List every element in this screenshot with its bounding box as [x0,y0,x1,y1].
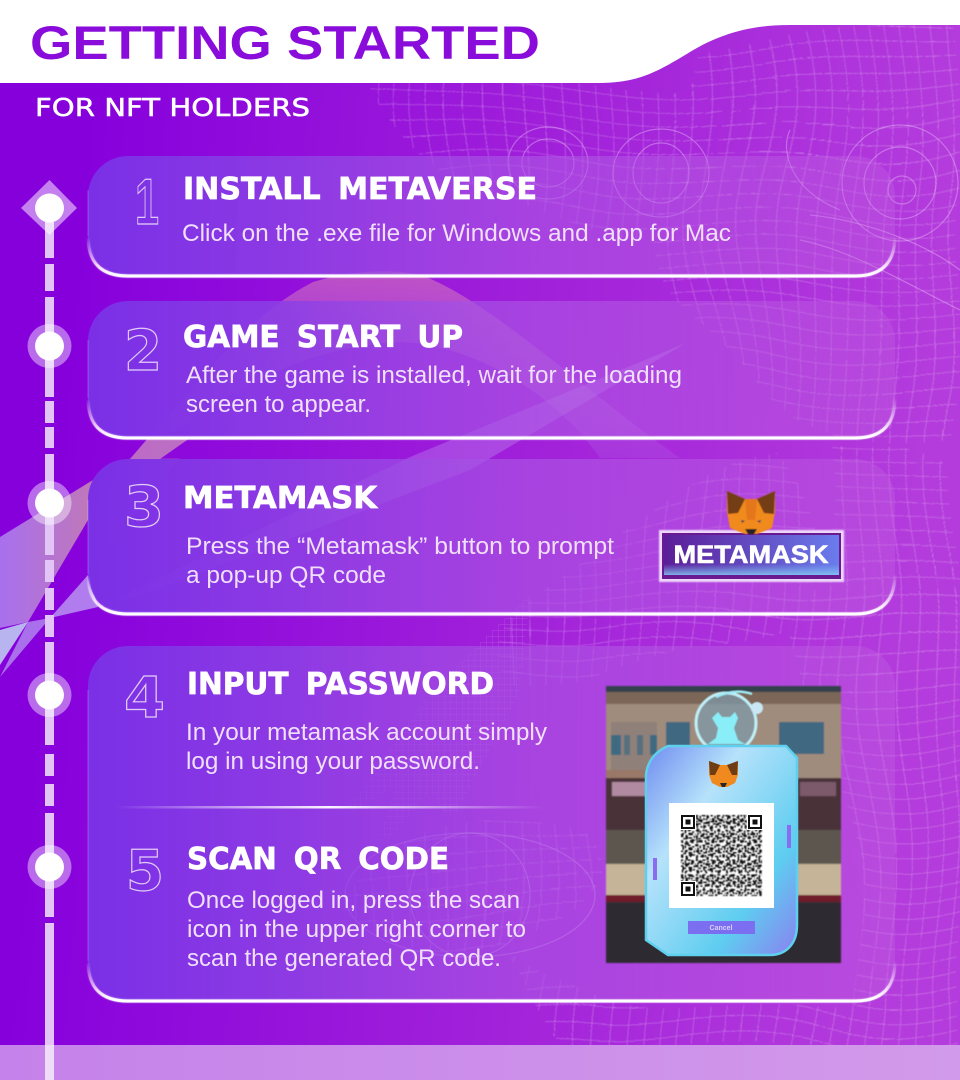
wireframe figure [340,0,960,1050]
panel 2: game start up [88,301,895,438]
timeline [21,180,77,1080]
panel 3: metamask [88,459,895,614]
heading 1: INSTALL METAVERSE [183,172,537,207]
panel 1: install metaverse [88,156,895,276]
step number 1: 1 [135,165,159,238]
game screenshot [606,686,841,963]
body 2: screen to appear. [186,391,371,418]
icon: small fox [709,761,738,787]
timeline marker 2 [28,324,72,368]
divider [115,806,545,808]
body 4: In your metamask account simply [186,719,548,746]
step number 5: 5 [126,839,164,904]
body 5: scan the generated QR code. [187,945,501,972]
icon: metamask fox [727,491,775,534]
title: GETTING STARTED [30,17,540,70]
step number 2: 2 [124,319,162,384]
header band [0,0,960,83]
qr code [669,803,774,908]
timeline marker 1 [21,180,77,235]
cancel button [688,921,755,934]
metamask button [659,530,844,582]
body 4: log in using your password. [186,748,480,775]
body 3: a pop-up QR code [186,562,386,589]
heading 3: METAMASK [183,481,379,516]
panel 4 and 5: input password and scan qr code [88,646,895,1001]
qr card [646,746,797,955]
heading 4: INPUT PASSWORD [187,667,494,702]
scanner ring [696,692,763,753]
timeline marker 4 [28,673,72,717]
heading 2: GAME START UP [183,320,463,355]
subtitle: FOR NFT HOLDERS [35,93,310,122]
body 3: Press the “Metamask” button to prompt [186,533,614,560]
timeline marker 5 [28,845,72,889]
body 1: Click on the .exe file for Windows and .app for Mac [182,220,731,247]
body 5: Once logged in, press the scan [187,887,520,914]
light beams [0,271,686,677]
cancel button: Cancel [710,925,733,932]
footer band [0,1045,960,1080]
body 5: icon in the upper right corner to [187,916,526,943]
heading 5: SCAN QR CODE [187,842,449,877]
metamask button: METAMASK [674,541,828,569]
timeline marker 3 [28,481,72,525]
body 2: After the game is installed, wait for the loading [186,362,682,389]
step number 3: 3 [124,475,164,540]
step number 4: 4 [124,666,165,731]
